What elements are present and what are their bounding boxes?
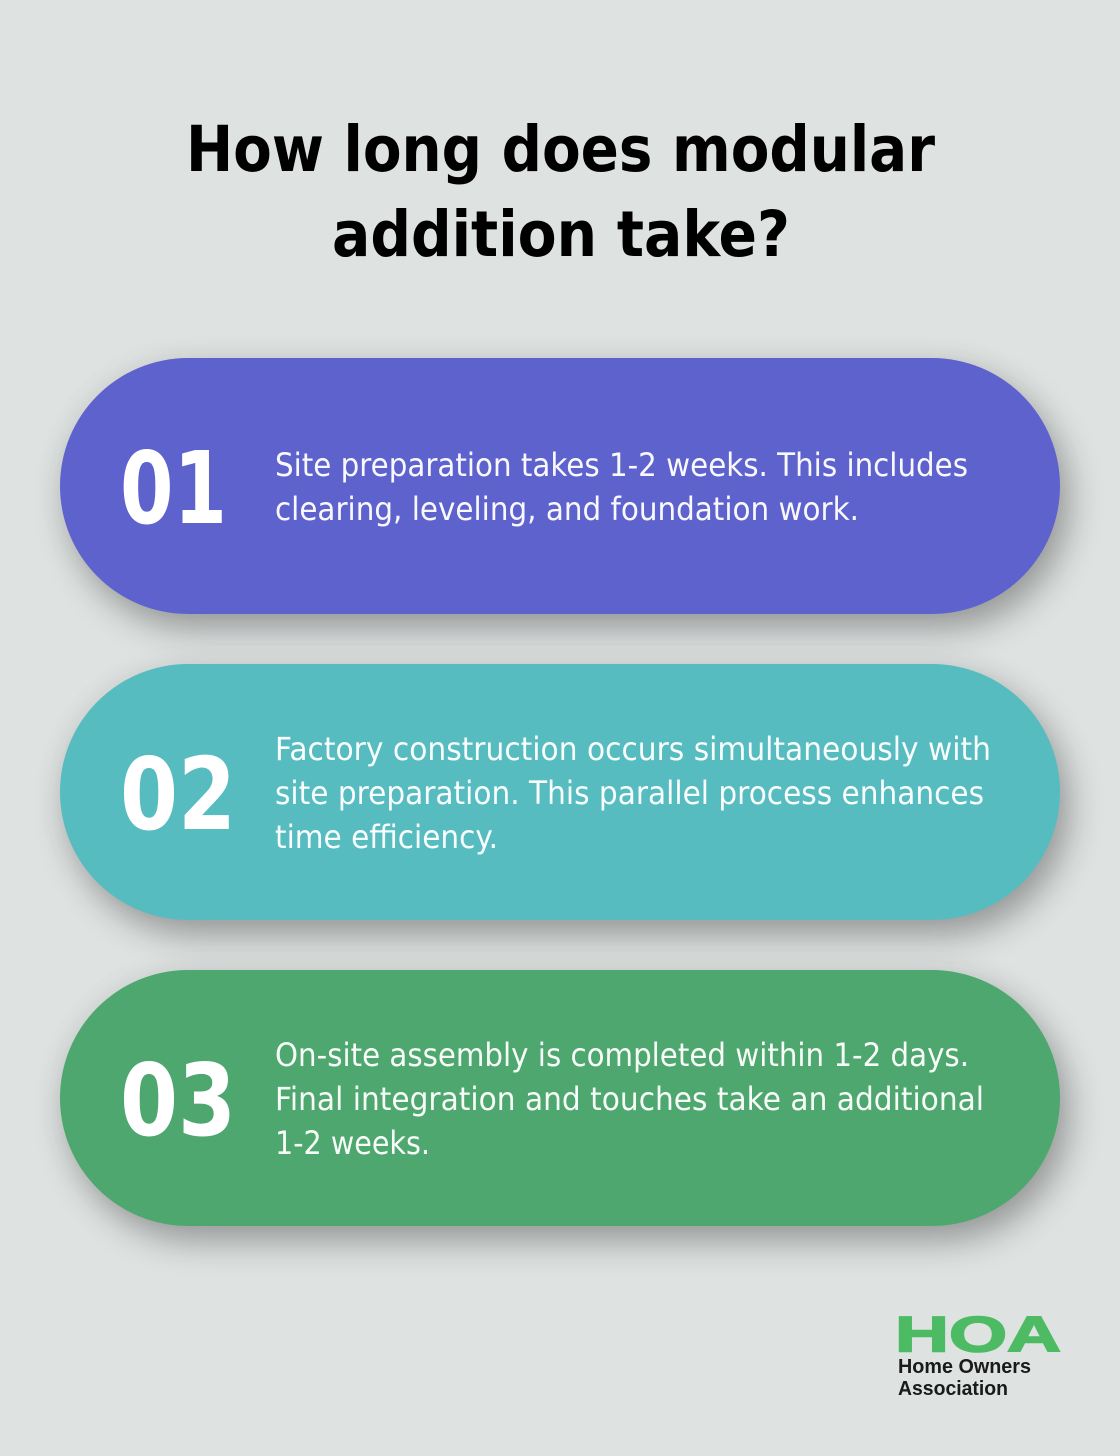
logo: HOA Home Owners Association: Home Owners [898, 1356, 1031, 1378]
text: on-site assembly: On-site assembly is completed within 1-2 days. [275, 1036, 969, 1074]
text: site preparation [275, 446, 968, 528]
text: site preparation: clearing, leveling, and foundation work. [275, 490, 859, 528]
number 01: 01 [120, 430, 227, 547]
panel: step 01 [60, 358, 1060, 614]
panel: step 03 [60, 970, 1060, 1226]
logo: HOA Home Owners Association [895, 1306, 1061, 1400]
title [186, 113, 935, 271]
title: How long does modular [186, 113, 935, 186]
text: on-site assembly: Final integration and touches take an additional [275, 1080, 984, 1118]
title: addition take? [332, 198, 790, 271]
text: factory construction: site preparation. This parallel process enhances [275, 774, 984, 812]
text: site preparation: Site preparation takes 1-2 weeks. This includes [275, 446, 968, 484]
logo: HOA Home Owners Association: Association [898, 1378, 1008, 1400]
number 03: 03 [120, 1042, 236, 1159]
text: factory construction: time efficiency. [275, 818, 498, 856]
number 02: 02 [120, 736, 236, 853]
text: on-site assembly: 1-2 weeks. [275, 1124, 430, 1162]
text: on-site assembly [275, 1036, 984, 1162]
logo: HOA Home Owners Association: HOA [895, 1306, 1061, 1362]
text: factory construction [275, 730, 991, 856]
text: factory construction: Factory construction occurs simultaneously with [275, 730, 991, 768]
panel: step 02 [60, 664, 1060, 920]
